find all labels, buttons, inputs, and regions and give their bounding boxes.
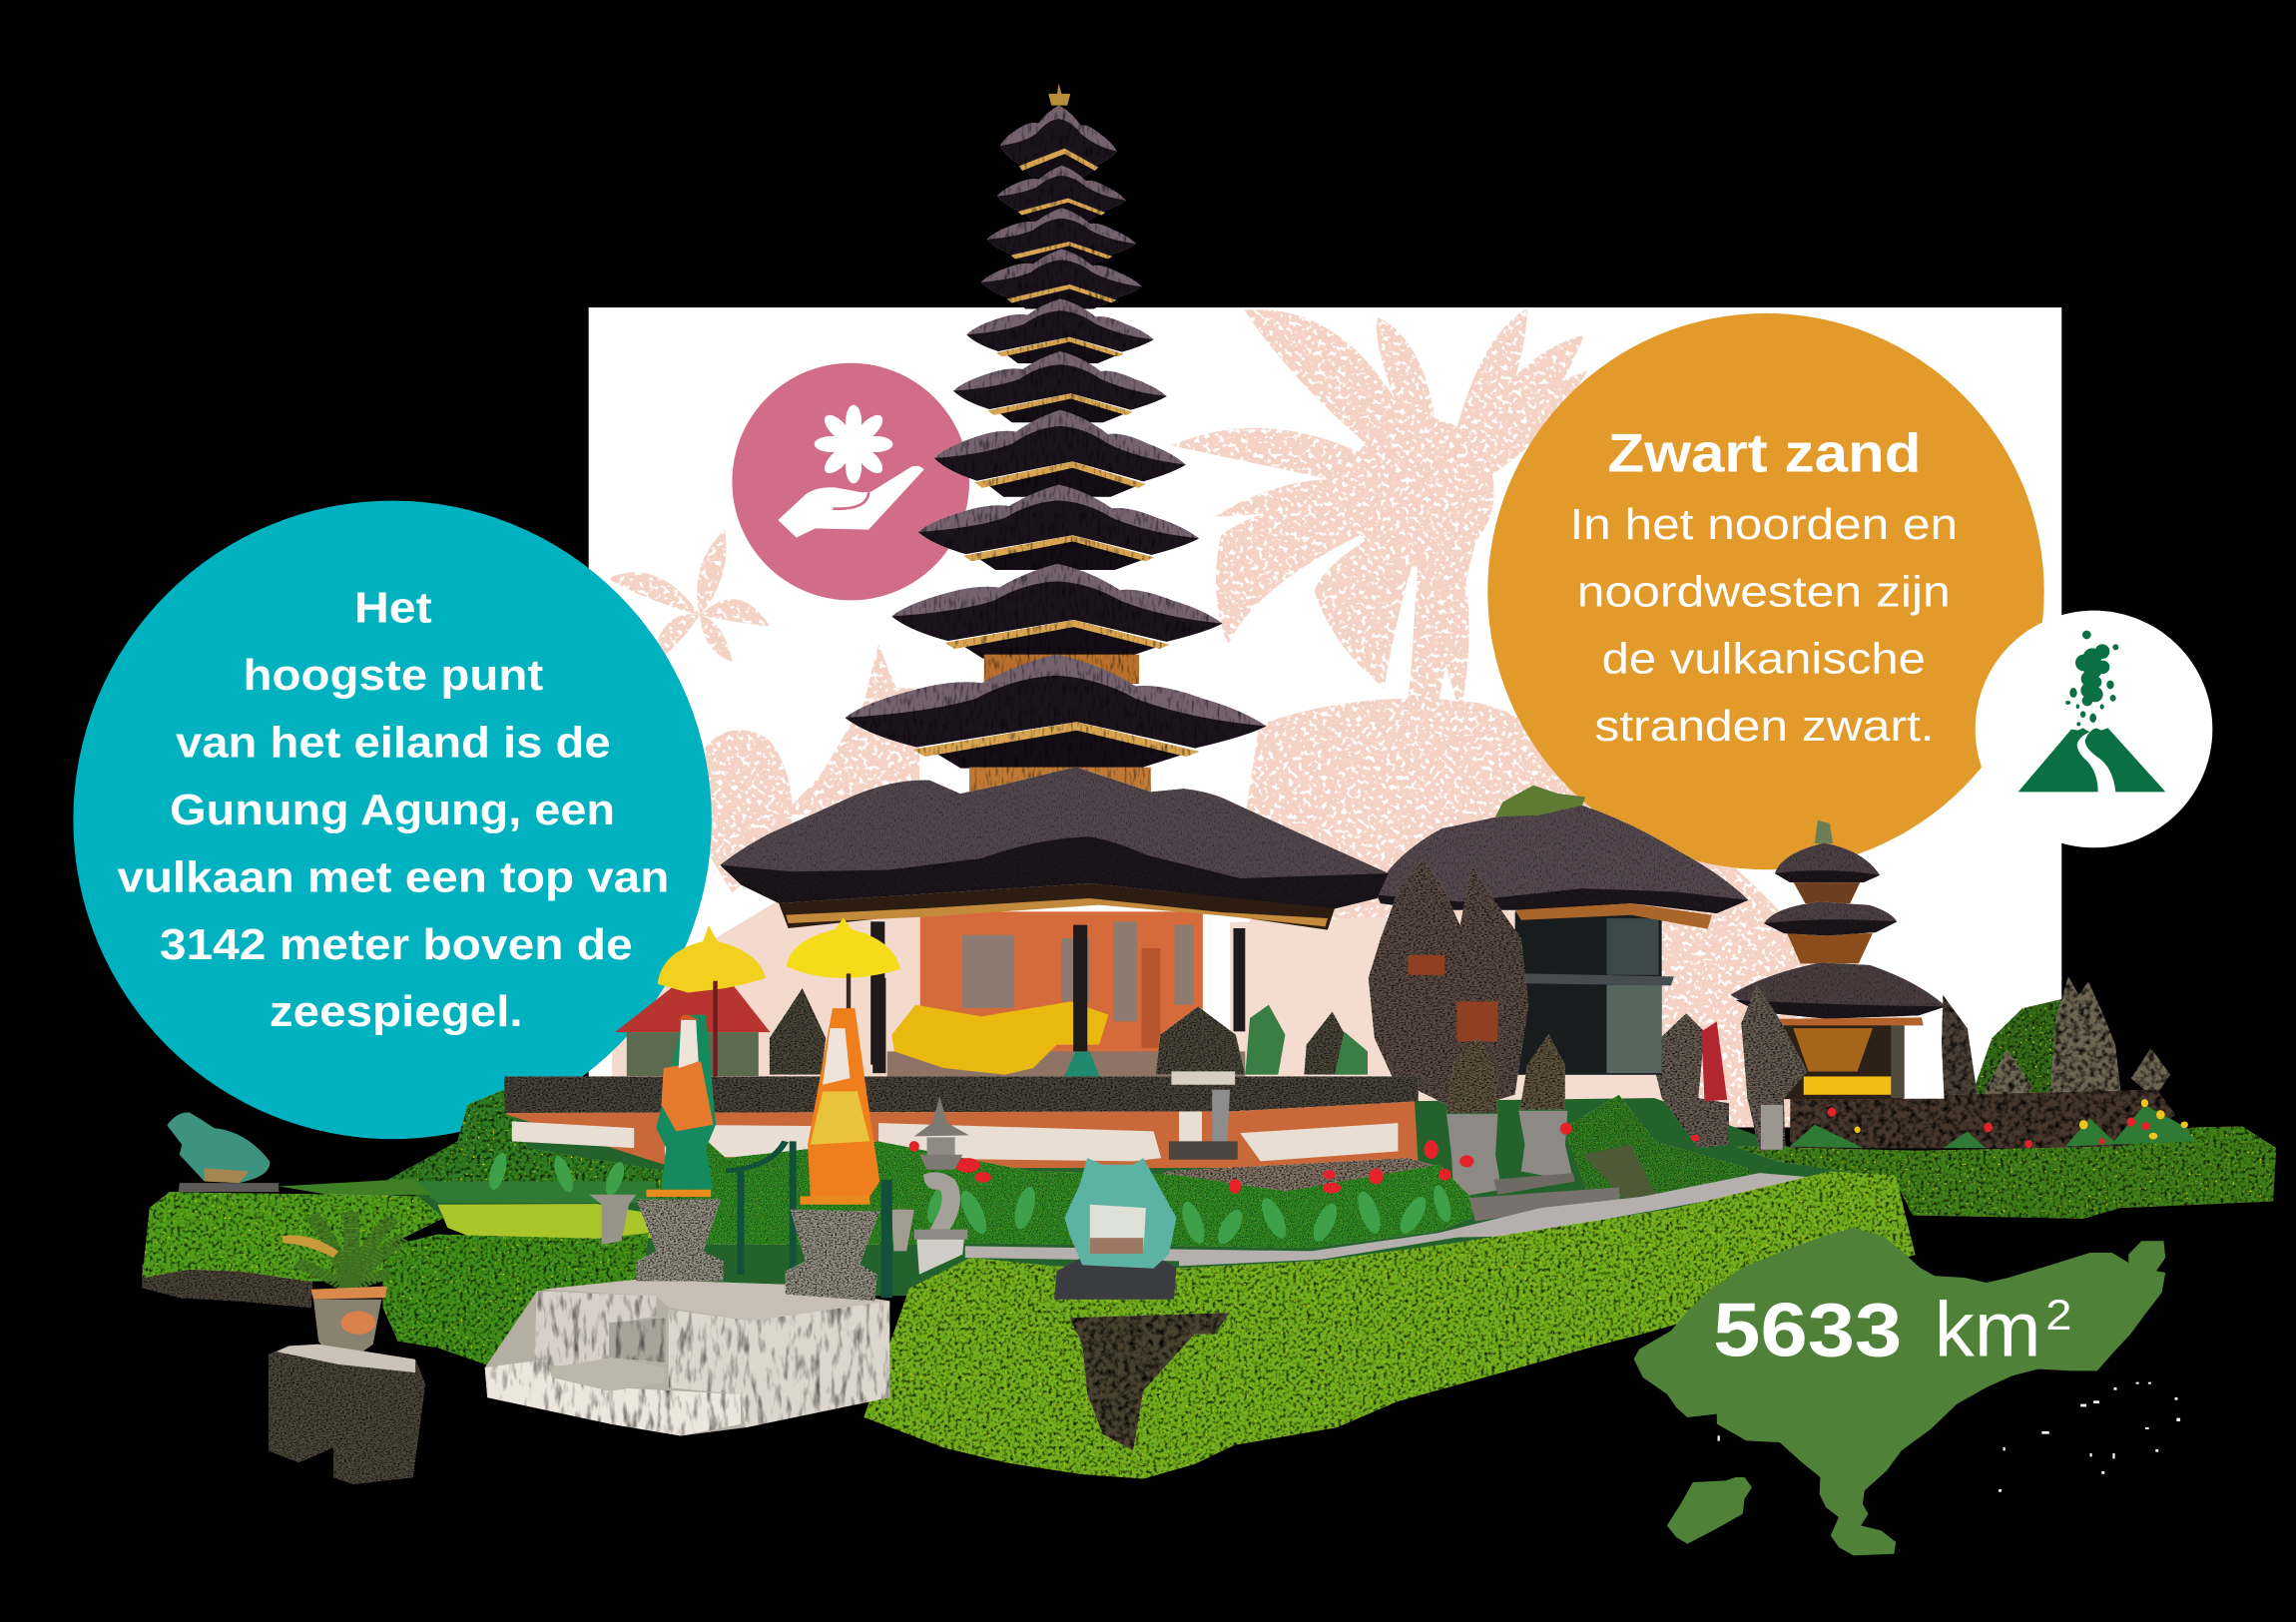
yellow cloth [891,1001,1108,1075]
big roof [720,767,1389,910]
second roof trim [1515,903,1712,929]
ornate gate [1369,858,1528,1111]
callout text: highest point: vulkaan met een top van [117,852,669,901]
rocks under hedge [142,1265,313,1308]
small pagoda trim [1778,1017,1924,1025]
second hedge [383,1233,649,1364]
map: Bali with area [1634,1228,2165,1555]
frog statue centre [1054,1158,1177,1300]
small pagoda roofs [1730,842,1946,1019]
callout text: highest point [117,583,669,1036]
right garden: statues [1940,976,2170,1098]
panel: white backdrop [589,307,2061,1127]
statues and gate [269,1008,887,1484]
right bed and steps [1469,1095,1753,1221]
umbrellas and red pavilion [615,918,900,1157]
callout text: highest point: van het eiland is de [176,718,611,767]
gate bars [726,1141,887,1298]
pavilion reliefs [962,921,1193,1021]
area figure: 5633 [1713,1288,1902,1372]
temple wall [504,1071,1419,1168]
small shrine body [1760,1008,1945,1099]
plant strip [413,1181,656,1203]
flower beds behind wall [388,1088,1133,1205]
lotus bases [646,1190,869,1205]
island shape [1634,1228,2165,1555]
teal pot [1064,1051,1100,1077]
second building [1369,786,1749,1198]
pink area behind temple [1230,912,1661,1101]
red flowers [676,1123,1572,1194]
stump top [277,1345,415,1372]
callout text: black sand: stranden zwart. [1594,702,1935,751]
gate red inlay [1408,955,1498,1041]
left hedge texture [142,1192,649,1364]
callout text: highest point: hoogste punt [243,651,544,700]
pale building backdrop [612,902,920,1076]
right wall [1790,1090,2175,1148]
callout text: black sand: de vulkanische [1602,635,1926,684]
first hedge [142,1192,443,1281]
pedestals [636,1200,879,1301]
small pagoda blocks [1793,881,1861,903]
pedestals [1446,1111,1573,1198]
right garden: tree [1971,998,2089,1098]
main hedge [863,1171,1916,1478]
steps backing [485,1280,889,1435]
small pagoda finial [1815,820,1833,843]
heading: black sand: Zwart zand [1608,422,1921,483]
stone steps [485,1280,889,1435]
callout text: highest point: Het [354,583,432,632]
lower plinth [887,1051,1245,1078]
frog statue left [167,1112,279,1192]
callout: orange circle [1487,313,2044,869]
pavilion wall [920,911,1203,1071]
back hedge [279,1179,432,1196]
right garden flowers [1790,1099,2193,1148]
big roof trim [779,883,1335,930]
roof moss [1495,786,1585,816]
garden underlay [395,1098,1904,1296]
small pagoda [1649,820,1946,1151]
potted plant [282,1211,403,1354]
temple pavilion [720,767,1389,1078]
flower beds [701,1135,1471,1248]
small shrines [770,988,1359,1075]
area figure: km [1935,1287,2041,1372]
hedge stump [1069,1313,1230,1450]
guardian statues [1446,1034,1565,1113]
icon: volcano in white circle [1976,611,2212,847]
main roof tiers [845,106,1267,794]
second roof [1375,806,1749,913]
lawn [437,1204,656,1240]
scattered specks [1718,1382,2180,1492]
callout text: black sand [1569,500,1958,751]
pavilion door [1142,948,1160,1048]
left statue upper [656,1015,716,1190]
step tops [542,1280,889,1321]
callout text: highest point: Gunung Agung, een [170,786,615,834]
callout text: black sand: In het noorden en [1569,500,1958,549]
icon: pink circle with hand and flower [732,363,969,600]
callout text: highest point: zeespiegel. [270,987,523,1036]
green plants [1245,1005,1368,1075]
area figure: 2 [2045,1292,2072,1340]
right statue upper [808,1008,879,1196]
callout: teal circle [73,501,712,1139]
illustration: pink palms and foliage [608,308,1933,1127]
callout text: highest point: 3142 meter boven de [160,920,633,969]
right hedge [1735,1126,2276,1219]
shrine ornaments [1649,985,1807,1151]
stone lantern [881,1096,1177,1300]
finial [1048,84,1070,106]
red cloth [1701,1021,1727,1101]
garden path [965,1173,1839,1266]
area figure [1713,1287,2072,1372]
small island [1667,1477,1752,1544]
post [1761,1105,1783,1150]
bed leaves [486,1151,1454,1248]
left hedge and lawn [142,1179,656,1364]
columns [870,921,1245,1065]
lava stone stump [269,1345,425,1484]
birdbath [589,1195,636,1245]
callout text: black sand: noordwesten zijn [1577,567,1951,616]
